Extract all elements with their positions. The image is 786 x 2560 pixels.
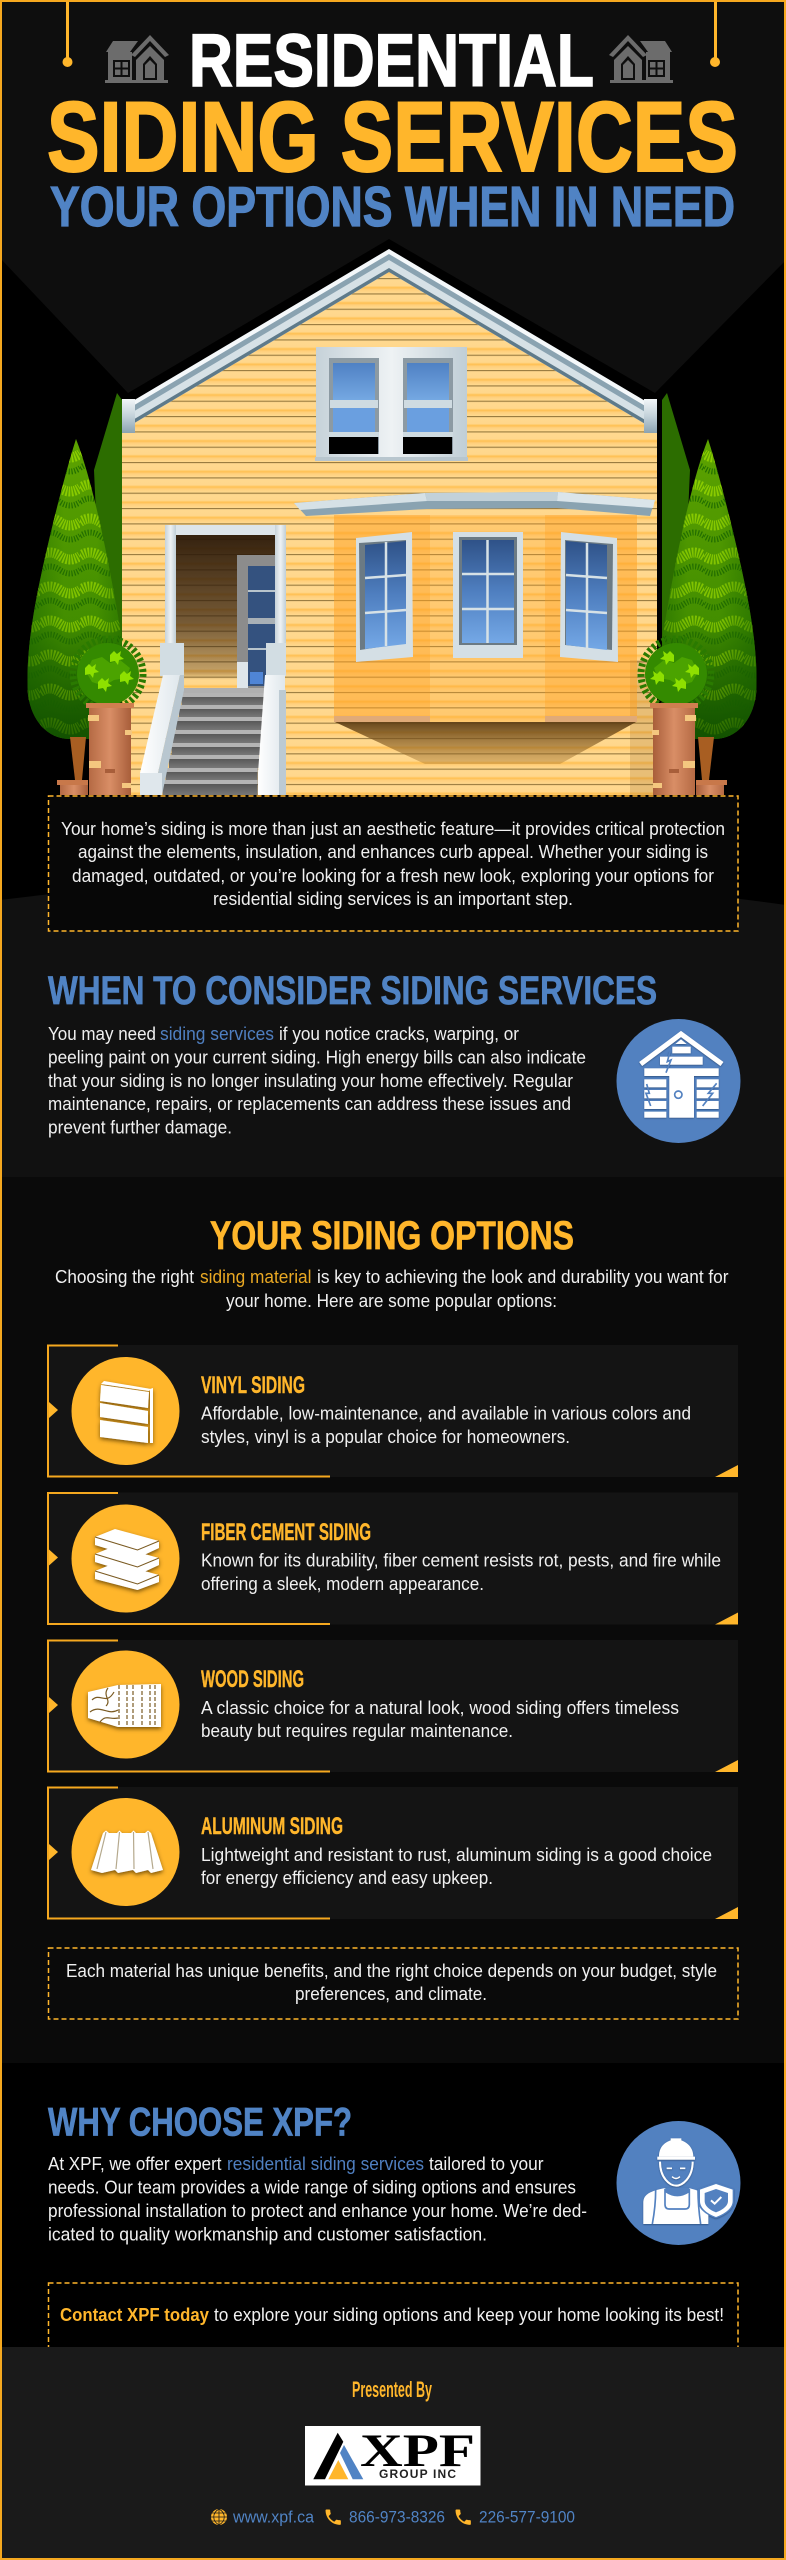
heading: why choose xpf: WHY CHOOSE XPF? xyxy=(48,2100,352,2144)
bay left window xyxy=(356,532,413,662)
icon: phone one xyxy=(326,2510,341,2525)
icon: wood planks xyxy=(88,1684,161,1727)
callout: material note: preferences, and climate. xyxy=(295,1984,487,2004)
bay window xyxy=(294,492,655,764)
panel: vinyl siding xyxy=(47,1345,738,1477)
intro section background xyxy=(0,876,786,1177)
fiber cement text: Known for its durability, fiber cement resists rot, pests, and fire while xyxy=(201,1551,721,1571)
house wall xyxy=(122,262,657,795)
vinyl text xyxy=(201,1404,691,1447)
aluminum text xyxy=(201,1845,712,1888)
bush and planter left xyxy=(73,639,143,795)
icon: house left xyxy=(105,35,169,83)
when to consider text: siding services xyxy=(160,1024,274,1044)
tree left xyxy=(20,393,130,795)
panel: wood siding xyxy=(47,1640,738,1772)
wall soft shadow xyxy=(630,660,657,795)
callout: contact xyxy=(48,2283,738,2363)
heading: your siding options: YOUR SIDING OPTIONS xyxy=(210,1214,574,1258)
aluminum text: Lightweight and resistant to rust, aluminum siding is a good choice xyxy=(201,1845,712,1865)
phone two: 226-577-9100 xyxy=(479,2508,575,2526)
roof trim xyxy=(122,249,657,433)
house illustration xyxy=(20,249,764,795)
callout: material note: Each material has unique benefits, and the right choice depends on your budget, style xyxy=(66,1961,717,1981)
icon: globe xyxy=(211,2509,227,2525)
bay roof xyxy=(294,492,655,516)
when to consider text: if you notice cracks, warping, or xyxy=(279,1024,519,1044)
wood text: A classic choice for a natural look, wood siding offers timeless xyxy=(201,1698,679,1718)
icon: damaged house xyxy=(616,1019,740,1143)
icon: contractor with shield xyxy=(616,2121,740,2245)
siding options intro text: siding material xyxy=(200,1267,312,1287)
presented by: Presented By xyxy=(352,2377,432,2402)
when to consider text: peeling paint on your current siding. High energy bills can also indicate xyxy=(48,1048,586,1068)
callout: material note xyxy=(48,1948,738,2019)
why choose text: needs. Our team provides a wide range of siding options and ensures xyxy=(48,2178,576,2198)
siding options intro text xyxy=(55,1267,728,1311)
bush and planter right xyxy=(641,639,711,795)
fiber cement text xyxy=(201,1551,721,1594)
bay right window xyxy=(560,532,618,662)
header dark backdrop xyxy=(0,0,786,393)
title line 1: RESIDENTIAL xyxy=(189,19,594,102)
footer panel xyxy=(0,2347,786,2560)
intro text xyxy=(61,819,725,909)
why section background xyxy=(0,2063,786,2347)
why choose text xyxy=(48,2154,587,2244)
siding options intro text: your home. Here are some popular options: xyxy=(226,1291,557,1311)
phone one: 866-973-8326 xyxy=(349,2508,445,2526)
when to consider text: prevent further damage. xyxy=(48,1118,232,1138)
intro text: damaged, outdated, or you’re looking for a fresh new look, exploring your options for xyxy=(72,866,714,886)
why choose text: icated to quality workmanship and customer satisfaction. xyxy=(48,2224,487,2244)
vinyl text: Affordable, low-maintenance, and available in various colors and xyxy=(201,1404,691,1424)
contact row xyxy=(211,2508,575,2526)
why choose text: At XPF, we offer expert xyxy=(48,2154,222,2174)
icon: vinyl panels xyxy=(100,1381,153,1443)
why choose text: tailored to your xyxy=(429,2154,544,2174)
panel: intro callout xyxy=(48,796,738,931)
bay center window xyxy=(453,532,523,658)
bay underside shadow xyxy=(335,722,636,764)
siding options intro text: Choosing the right xyxy=(55,1267,194,1287)
wood text xyxy=(201,1698,679,1741)
when to consider text xyxy=(48,1024,586,1138)
title xyxy=(47,19,738,239)
attic window xyxy=(315,347,468,461)
callout: contact: Contact XPF today xyxy=(60,2305,209,2325)
aluminum heading: ALUMINUM SIDING xyxy=(201,1813,343,1840)
why choose text: residential siding services xyxy=(227,2154,424,2174)
why choose text: professional installation to protect and enhance your home. We’re ded- xyxy=(48,2201,587,2221)
wood heading: WOOD SIDING xyxy=(201,1666,304,1693)
siding options intro text: is key to achieving the look and durability you want for xyxy=(317,1267,728,1287)
fiber cement text: offering a sleek, modern appearance. xyxy=(201,1574,484,1594)
panel: aluminum siding xyxy=(47,1787,738,1919)
intro text: Your home’s siding is more than just an aesthetic feature—it provides critical protection xyxy=(61,819,725,839)
icon: house right xyxy=(609,35,673,83)
when to consider text: You may need xyxy=(48,1024,156,1044)
logo: GROUP INC xyxy=(379,2467,456,2481)
aluminum text: for energy efficiency and easy upkeep. xyxy=(201,1868,493,1888)
callout: contact: to explore your siding options and keep your home looking its best! xyxy=(214,2305,724,2325)
icon: aluminum sheet xyxy=(91,1830,163,1873)
vinyl text: styles, vinyl is a popular choice for homeowners. xyxy=(201,1427,570,1447)
logo xyxy=(305,2425,480,2486)
vinyl heading: VINYL SIDING xyxy=(201,1372,305,1399)
wood text: beauty but requires regular maintenance. xyxy=(201,1721,513,1741)
tree right xyxy=(654,393,764,795)
options section background xyxy=(0,1177,786,2063)
when to consider text: maintenance, repairs, or replacements can address these issues and xyxy=(48,1094,571,1114)
website: www.xpf.ca xyxy=(232,2508,315,2526)
stairs xyxy=(163,688,265,795)
intro text: residential siding services is an important step. xyxy=(213,889,573,909)
hanging decorative lines xyxy=(62,0,720,67)
panel: fiber cement siding xyxy=(47,1492,738,1624)
stair rails xyxy=(140,643,286,795)
when to consider text: that your siding is no longer insulating your home effectively. Regular xyxy=(48,1071,573,1091)
icon: fiber cement boards xyxy=(95,1529,159,1590)
intro text: against the elements, insulation, and enhances curb appeal. Whether your siding is xyxy=(78,842,708,862)
logo: XPF xyxy=(360,2425,475,2477)
icon: phone two xyxy=(456,2510,471,2525)
fiber cement heading: FIBER CEMENT SIDING xyxy=(201,1519,371,1546)
front door porch xyxy=(165,525,286,690)
